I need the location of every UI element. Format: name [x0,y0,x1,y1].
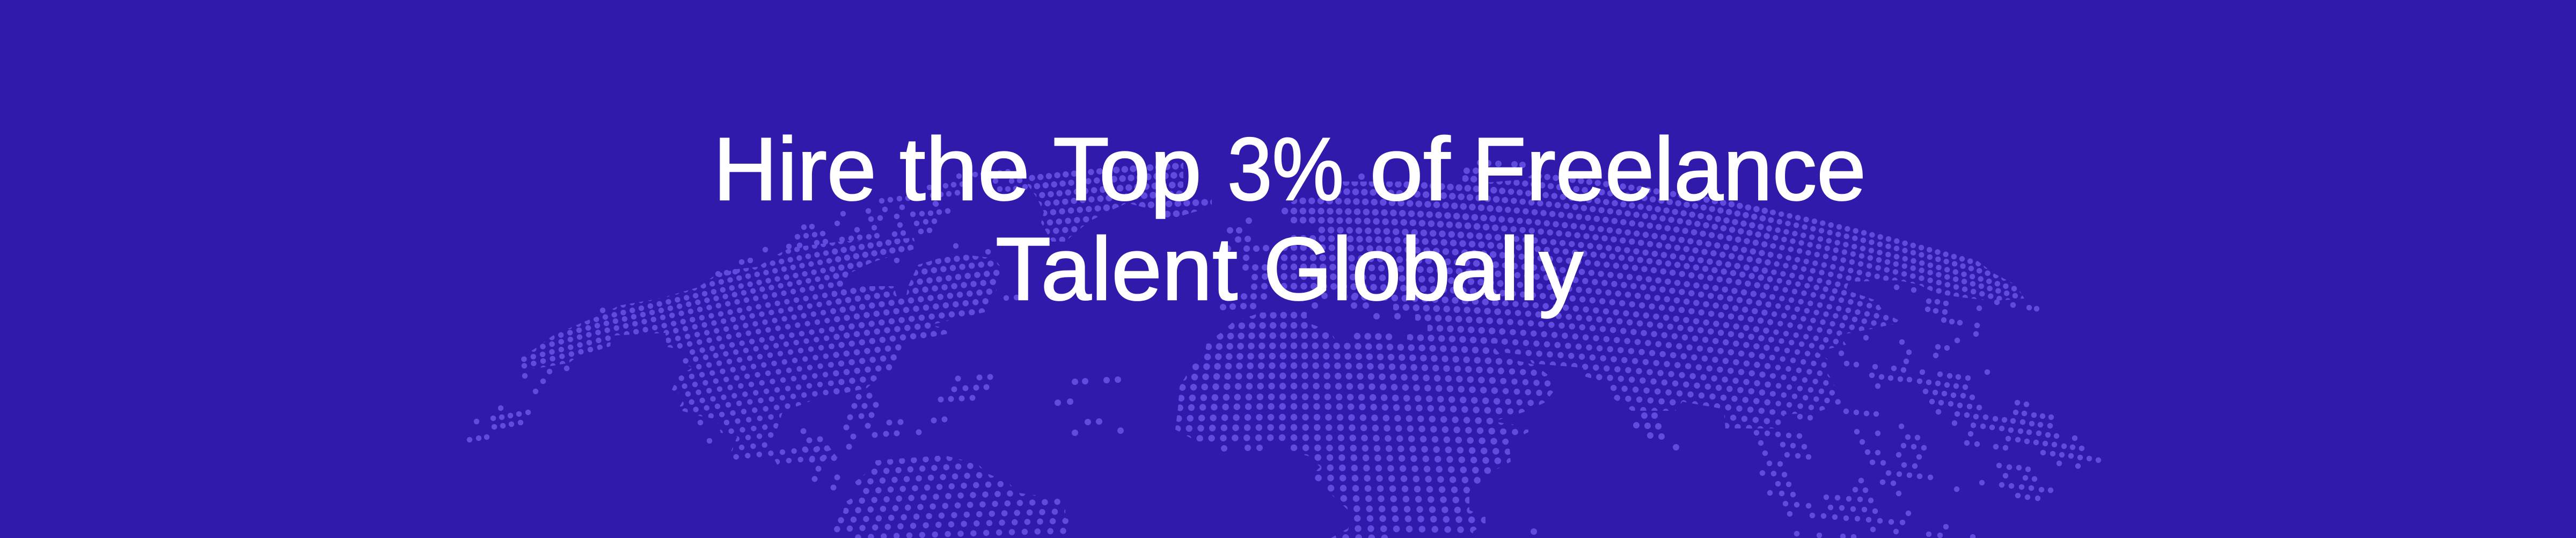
islands and coasts: Caribbean and South Atlantic dots [803,377,990,488]
islands and coasts: North American and Arctic dots [470,172,1025,441]
title line 1: the [899,120,1030,219]
title line 1: 3% [1227,120,1344,219]
continents: dense dot rows clipped to land shapes [521,162,2024,538]
title line 2 [996,220,1583,319]
title line 1: Hire [713,120,876,219]
title line 1 [713,120,1866,219]
title line 2: Globally [1263,220,1583,319]
title [713,120,1866,319]
dotted world map [467,160,2102,538]
islands and coasts: East and South-East Asian dots [1757,287,2098,537]
title line 2: Talent [996,220,1238,319]
islands and coasts: Europe and Atlantic dots [1058,163,1676,532]
title line 1: Top [1053,120,1202,219]
title line 1: of [1370,120,1451,219]
title line 1: Freelance [1472,120,1866,219]
